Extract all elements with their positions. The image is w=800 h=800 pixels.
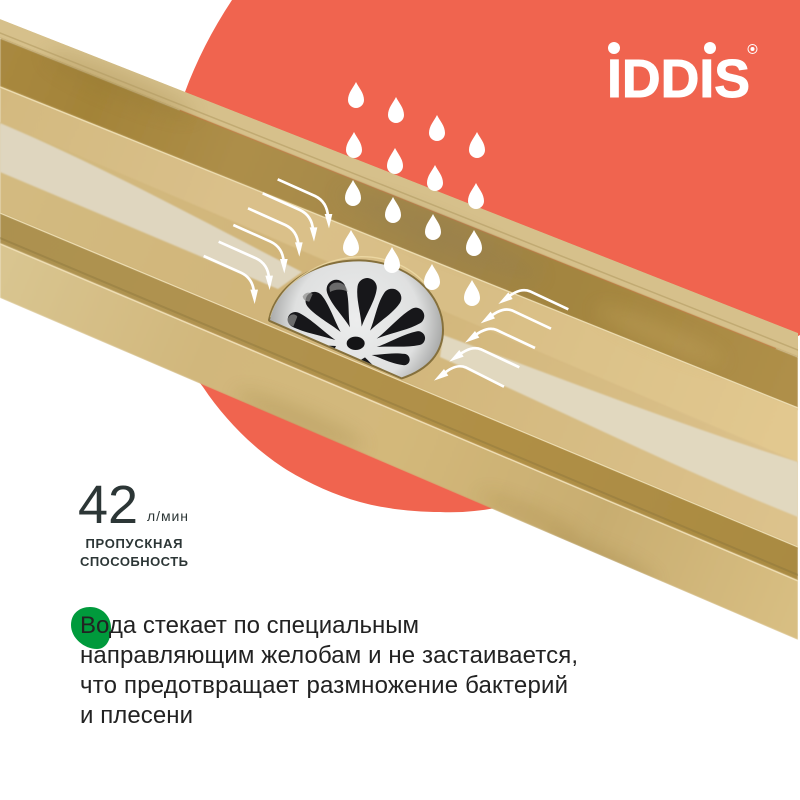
coral background blob xyxy=(164,0,800,512)
channel lower dark wall xyxy=(0,213,798,581)
water drops xyxy=(343,82,485,306)
floor drain grate xyxy=(270,257,442,377)
stat caption: ПРОПУСКНАЯ xyxy=(86,536,182,551)
pale light reflection left xyxy=(0,123,302,289)
channel shading blotches xyxy=(52,52,672,578)
grate steel dome xyxy=(270,261,442,377)
stat caption xyxy=(80,536,188,569)
body text: направляющим желобам и не застаивается, xyxy=(80,642,578,669)
channel lower sloped band xyxy=(0,122,798,549)
grate glints xyxy=(287,282,348,327)
stat unit: л/мин xyxy=(147,508,188,524)
channel upper sloped band xyxy=(0,86,798,464)
stat number: 42 xyxy=(78,475,138,535)
IDDIS logo: IDDIS xyxy=(607,49,750,109)
green accent blob xyxy=(71,607,111,649)
body text xyxy=(80,612,578,729)
arrows: flow from the right xyxy=(434,290,568,387)
grate rim highlight xyxy=(271,257,425,317)
stat caption: СПОСОБНОСТЬ xyxy=(80,554,188,569)
drain channel xyxy=(0,19,798,640)
grate centre hub xyxy=(347,337,365,350)
channel top rim xyxy=(0,19,798,357)
body text: и плесени xyxy=(80,702,193,729)
grate petal slots xyxy=(285,277,427,366)
pale light reflection right xyxy=(440,335,798,517)
grate rim xyxy=(270,261,442,377)
channel highlight lines xyxy=(0,33,798,581)
body text: Вода стекает по специальным xyxy=(80,612,419,639)
arrows: flow from the left xyxy=(204,179,332,304)
channel bottom rim xyxy=(0,243,798,640)
body text: что предотвращает размножение бактерий xyxy=(80,672,568,699)
stat: 42 l/min throughput xyxy=(78,475,188,569)
channel upper dark wall xyxy=(0,38,798,410)
